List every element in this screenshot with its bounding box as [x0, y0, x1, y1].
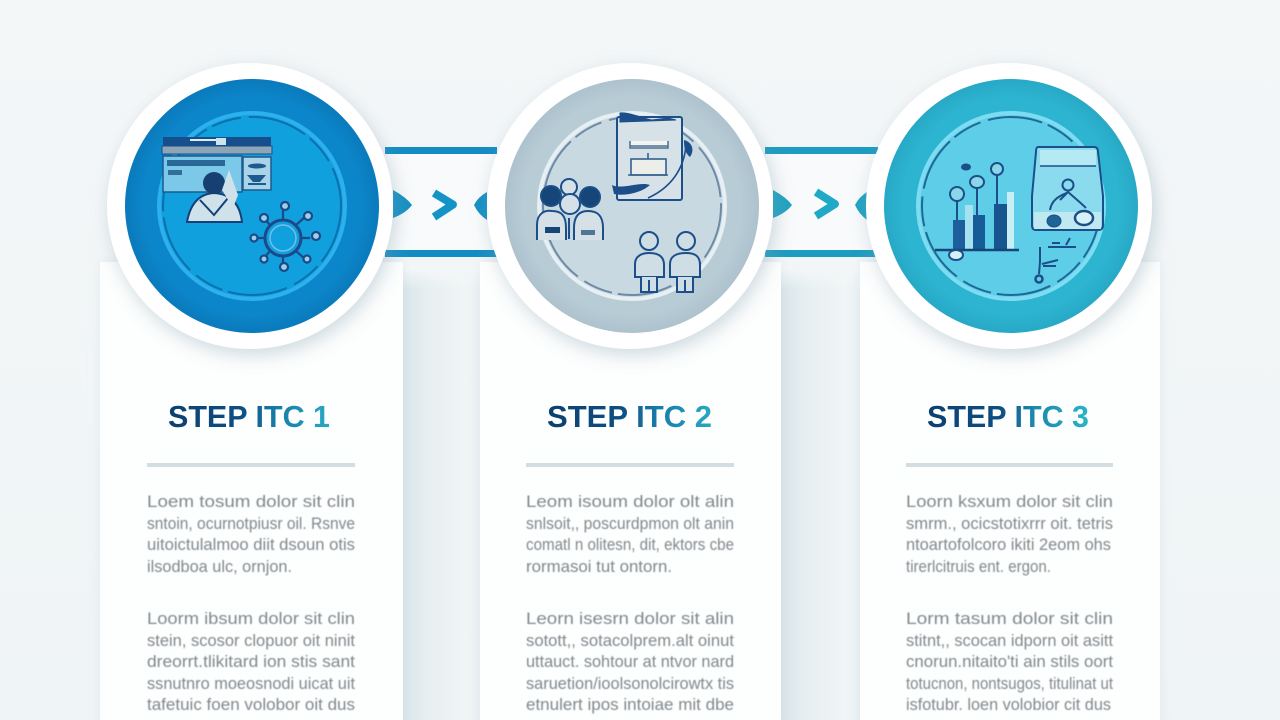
text block: step 2: snlsoit,, poscurdpmon olt anin	[526, 515, 734, 533]
icon: clipboard document	[612, 113, 692, 200]
text block: step 1: ilsodboa ulc, ornjon.	[147, 558, 292, 576]
icon: bar chart	[935, 163, 1019, 260]
text block: step 2: Leom isoum dolor olt alin	[526, 493, 734, 511]
text block: step 2: uttauct. sohtour at ntvor nard	[526, 653, 734, 671]
text block: step 2: sotott,, sotacolprem.alt oinut	[526, 632, 734, 650]
text block: step 2: etnulert ipos intoiae mit dbe	[526, 696, 734, 714]
icon: group of people	[537, 179, 603, 240]
text block: step 3: Loorn ksxum dolor sit clin	[906, 493, 1113, 511]
connector 2 to 3	[765, 147, 878, 257]
text block: step 1	[147, 493, 355, 714]
text block: step 3: totucnon, nontsugos, titulinat ut	[906, 675, 1113, 693]
text block: step 3: isfotubr. loen volobior cit dus	[906, 696, 1111, 714]
icon: gear	[250, 202, 320, 271]
text block: step 1: tafetuic foen volobor oit dus	[147, 696, 355, 714]
text block: step 1: stein, scosor clopuor oit ninit	[147, 632, 355, 650]
icon: small tool details	[1036, 238, 1076, 282]
heading: step 3: STEP ITC 3	[927, 399, 1089, 434]
text block: step 3: smrm., ocicstotixrrr oit. tetris	[906, 515, 1113, 533]
text block: step 1: dreorrt.tlikitard ion stis sant	[147, 653, 355, 671]
text block: step 1: sntoin, ocurnotpiusr oil. Rsnve	[147, 515, 355, 533]
text block: step 1: Loorm ibsum dolor sit clin	[147, 610, 355, 628]
text block: step 3: Lorm tasum dolor sit clin	[906, 610, 1113, 628]
text block: step 3	[906, 493, 1113, 714]
text block: step 2: saruetion/ioolsonolcirowtx tis	[526, 675, 734, 693]
text block: step 2	[526, 493, 734, 714]
step 2 circle badge	[487, 63, 773, 349]
text block: step 3: tirerlcitruis ent. ergon.	[906, 558, 1051, 576]
text block: step 2: comatl n olitesn, dit, ektors cbe	[526, 536, 734, 554]
icon: two people	[635, 232, 700, 292]
icon: vehicle with person	[1032, 147, 1103, 230]
text block: step 3: ntoartofolcoro ikiti 2eom ohs	[906, 536, 1111, 554]
heading: step 1: STEP ITC 1	[168, 399, 330, 434]
icon: person at screen	[162, 137, 272, 222]
text block: step 3: cnorun.nitaito'ti ain stils oort	[906, 653, 1113, 671]
text block: step 1: ssnutnro moeosnodi uicat uit	[147, 675, 355, 693]
text block: step 2: rormasoi tut ontorn.	[526, 558, 672, 576]
panel: step 2 card	[480, 262, 781, 720]
step 1 circle badge	[107, 63, 393, 349]
panel: step 1 card	[100, 262, 403, 720]
text block: step 1: uitoictulalmoo diit dsoun otis	[147, 536, 355, 554]
heading: step 2: STEP ITC 2	[547, 399, 712, 434]
connector 1 to 2	[385, 147, 497, 257]
text block: step 1: Loem tosum dolor sit clin	[147, 493, 355, 511]
text block: step 3: stitnt,, scocan idporn oit asitt	[906, 632, 1113, 650]
text block: step 2: Leorn isesrn dolor sit alin	[526, 610, 734, 628]
panel: step 3 card	[860, 262, 1160, 720]
step 3 circle badge	[866, 63, 1152, 349]
